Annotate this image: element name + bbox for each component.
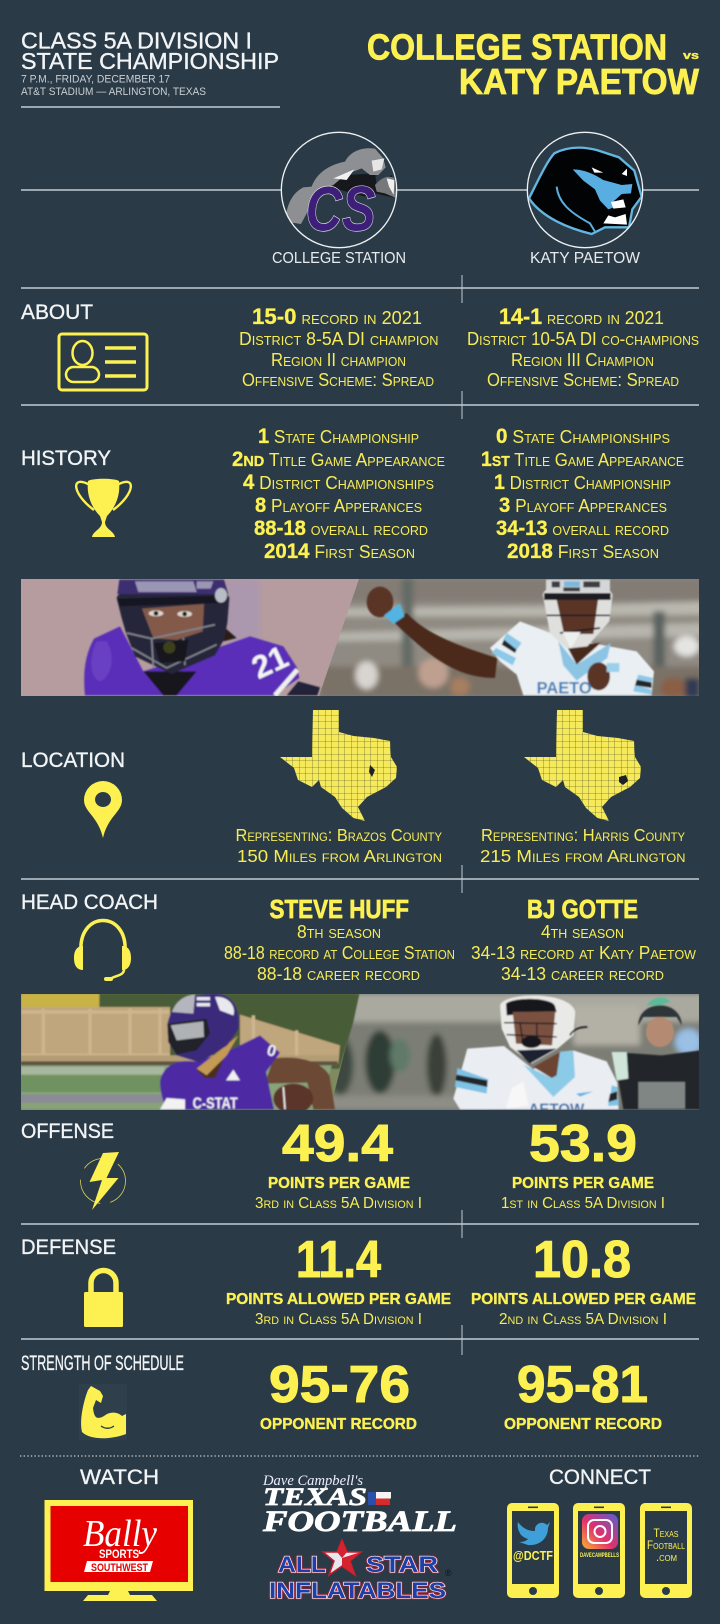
stat: College Station offense: POINTS PER GAME [268, 1175, 410, 1192]
text: Steve Huff: STEVE HUFF [270, 894, 409, 924]
icon: phone with website [640, 1503, 692, 1598]
icon: padlock [84, 1270, 123, 1327]
logo: All Star Inflatables: ALL [278, 1552, 326, 1577]
heading: connect: CONNECT [549, 1466, 651, 1489]
text: Katy Paetow history: 3 Playoff Apperances [499, 494, 667, 517]
text: Katy Paetow about: 14-1 record in 2021 [499, 304, 664, 329]
icon: lightning bolt [80, 1152, 126, 1210]
icon: television [44, 1500, 193, 1601]
logo: All Star Inflatables: ® [445, 1568, 452, 1578]
photo: College Station runner: 0 [265, 1042, 278, 1061]
arm and football [265, 1058, 335, 1109]
text: Katy Paetow history: 1st Title Game Appearance [481, 448, 684, 471]
photo: Katy Paetow receiver [330, 994, 699, 1110]
jersey [453, 1046, 619, 1109]
text: BJ Gotte: BJ GOTTE [527, 894, 638, 924]
team names: COLLEGE STATION [272, 250, 406, 267]
heading: offense: OFFENSE [21, 1120, 114, 1143]
logo: Dave Campbell's Texas Football [262, 1473, 457, 1538]
diagonal panel: College Station side [21, 579, 359, 696]
text: Katy Paetow history: 2018 First Season [507, 540, 659, 563]
stat: Katy Paetow defense: 2nd in Class 5A Division I [499, 1311, 667, 1328]
text: College Station about: Region II champion [271, 350, 406, 370]
icon: id card [59, 334, 147, 390]
text: College Station history: 8 Playoff Apperances [255, 494, 422, 517]
text: College Station about: Offensive Scheme: Spread [242, 370, 434, 390]
stat: Katy Paetow defense: 10.8 [533, 1231, 631, 1289]
diagonal panel: College Station side [21, 994, 359, 1110]
text: Katy Paetow location [480, 825, 686, 866]
icon: phone with instagram [573, 1503, 625, 1598]
photo: College Station defensive back: 21 [246, 638, 294, 686]
icon: phone with twitter [507, 1503, 559, 1598]
text: College Station history [232, 425, 445, 563]
text: Katy Paetow about: District 10-5A DI co-champions [467, 329, 699, 349]
text: College Station history: 88-18 overall record [254, 517, 428, 540]
title: matchup: COLLEGE STATION [367, 26, 667, 68]
icon: phone with website: Football [647, 1540, 685, 1552]
logo: Bally Sports Southwest: Bally [83, 1513, 157, 1555]
logo: Katy Paetow panther [527, 132, 643, 248]
logo: Bally Sports Southwest [83, 1513, 157, 1574]
text: BJ Gotte [471, 894, 697, 984]
icon: phone with twitter: @DCTF [513, 1548, 553, 1563]
text: College Station about [239, 304, 438, 390]
text: Steve Huff [224, 894, 455, 984]
helmet [500, 995, 575, 1064]
heading: location: LOCATION [21, 749, 125, 772]
header: game details [21, 28, 279, 98]
team names: KATY PAETOW [530, 250, 641, 267]
text: College Station about: District 8-5A DI champion [239, 329, 438, 349]
text: BJ Gotte: 4th season [541, 922, 624, 942]
icon: headset [74, 920, 131, 981]
panel: strength of schedule [21, 1352, 662, 1440]
jersey [160, 1035, 280, 1109]
icon: phone with website: .com [656, 1552, 677, 1564]
panel: offense [21, 1115, 665, 1212]
logo: Dave Campbell's Texas Football: TEXAS [263, 1484, 367, 1511]
logo: Bally Sports Southwest: SPORTS [99, 1547, 139, 1561]
helmet [117, 583, 229, 674]
stat: College Station schedule: OPPONENT RECORD [260, 1416, 417, 1433]
heading: history: HISTORY [21, 447, 111, 470]
text: BJ Gotte: 34-13 record at Katy Paetow [471, 943, 697, 963]
jersey [84, 626, 299, 695]
text: Katy Paetow location: 215 Miles from Arlington [480, 846, 686, 866]
panel: about [21, 301, 699, 390]
stat: College Station offense: 49.4 [282, 1115, 393, 1173]
map: Texas, Harris County [524, 710, 641, 821]
stat: Katy Paetow schedule [504, 1356, 662, 1433]
icon: trophy [76, 479, 131, 537]
header: game details: 7 P.M., FRIDAY, DECEMBER 17 [21, 74, 170, 86]
stat: Katy Paetow offense: 1st in Class 5A Division I [501, 1195, 665, 1212]
photo: Katy Paetow quarterback: PAETO [537, 679, 592, 698]
stat: Katy Paetow schedule: 95-81 [517, 1356, 648, 1414]
stat: College Station offense: 3rd in Class 5A Division I [255, 1195, 422, 1212]
stat: Katy Paetow offense: POINTS PER GAME [512, 1175, 654, 1192]
jersey [490, 621, 654, 695]
panel: head coach [21, 891, 697, 984]
text: College Station history: 2014 First Season [264, 540, 415, 563]
text: Steve Huff: 8th season [297, 922, 381, 942]
map: Texas, Brazos County [280, 710, 397, 821]
title: matchup: vs [683, 50, 699, 62]
text: Katy Paetow about [467, 304, 699, 390]
text: Katy Paetow history: 34-13 overall record [496, 517, 669, 540]
stat: College Station schedule: 95-76 [269, 1356, 410, 1414]
text: College Station about: 15-0 record in 2021 [252, 304, 422, 329]
header: game details: AT&T STADIUM — ARLINGTON, TEXAS [21, 86, 206, 98]
photo: College Station defensive back [84, 580, 320, 695]
photo: Katy Paetow quarterback [320, 578, 703, 699]
text: Katy Paetow about: Offensive Scheme: Spread [487, 370, 679, 390]
stat: College Station schedule [260, 1356, 417, 1433]
logo: Bally Sports Southwest: SOUTHWEST [91, 1562, 148, 1574]
stat: Katy Paetow offense [501, 1115, 665, 1212]
text: Katy Paetow history: 1 District Championship [494, 471, 671, 494]
logo: Dave Campbell's Texas Football: FOOTBALL [262, 1505, 457, 1538]
logo: All Star Inflatables: STAR [366, 1552, 438, 1577]
icon: map pin [84, 781, 122, 838]
heading: about: ABOUT [21, 301, 93, 324]
text: College Station location: Representing: Brazos County [236, 825, 442, 845]
logo: Dave Campbell's Texas Football: Dave Campbell's [262, 1473, 363, 1489]
panel: defense [21, 1231, 696, 1328]
heading: defense: DEFENSE [21, 1236, 116, 1259]
team names [272, 250, 641, 267]
text: Katy Paetow history: 0 State Championships [496, 425, 670, 448]
panel: location [21, 705, 686, 866]
helmet [167, 994, 239, 1063]
helmet [543, 583, 613, 649]
stat: Katy Paetow schedule: OPPONENT RECORD [504, 1416, 662, 1433]
panel: history [21, 425, 684, 563]
text: College Station history: 2nd Title Game Appearance [232, 448, 445, 471]
text: College Station location: 150 Miles from Arlington [237, 846, 442, 866]
logo: College Station cougar: CS [306, 175, 376, 245]
stat: Katy Paetow offense: 53.9 [529, 1115, 637, 1173]
title: matchup: KATY PAETOW [459, 61, 699, 102]
stat: College Station defense: 11.4 [296, 1231, 381, 1289]
text: Steve Huff: 88-18 record at College Station [224, 943, 455, 963]
logo: All Star Inflatables [269, 1540, 452, 1603]
icon: flexed arm [79, 1384, 127, 1440]
logo: All Star Inflatables: INFLATABLES [269, 1578, 446, 1603]
stat: College Station defense: 3rd in Class 5A Division I [255, 1311, 422, 1328]
panel: connect [507, 1466, 692, 1598]
stat: Katy Paetow defense: POINTS ALLOWED PER GAME [471, 1291, 696, 1308]
panel: watch [44, 1466, 193, 1601]
logo: College Station cougar [281, 132, 397, 248]
heading: head coach: HEAD COACH [21, 891, 158, 914]
icon: phone with instagram: DAVECAMPBELLS [580, 1553, 619, 1559]
heading: strength of schedule: STRENGTH OF SCHEDULE [21, 1352, 184, 1375]
text: Katy Paetow location: Representing: Harris County [481, 825, 685, 845]
stat: College Station defense: POINTS ALLOWED PER GAME [226, 1291, 451, 1308]
header: game details: CLASS 5A DIVISION I [21, 28, 252, 54]
text: Katy Paetow about: Region III Champion [511, 350, 654, 370]
text: BJ Gotte: 34-13 career record [501, 964, 664, 984]
header: game details: STATE CHAMPIONSHIP [21, 48, 279, 74]
text: College Station history: 4 District Championships [243, 471, 434, 494]
text: Katy Paetow history [481, 425, 684, 563]
icon: phone with website: Texas [654, 1528, 678, 1540]
photo: Katy Paetow receiver: AETOW [528, 1102, 585, 1119]
stat: College Station defense [226, 1231, 451, 1328]
photo banner: players one [21, 578, 703, 699]
arm [393, 613, 497, 678]
text: College Station history: 1 State Championship [258, 425, 419, 448]
stat: Katy Paetow defense [471, 1231, 696, 1328]
far player [612, 997, 700, 1109]
photo banner: players two [21, 992, 703, 1119]
photo: College Station runner [21, 994, 359, 1114]
text: Steve Huff: 88-18 career record [257, 964, 420, 984]
text: College Station location [236, 825, 442, 866]
stat: College Station offense [255, 1115, 422, 1212]
heading: watch: WATCH [80, 1466, 159, 1489]
title: matchup [367, 26, 699, 102]
photo: College Station runner: C-STAT [193, 1096, 238, 1113]
